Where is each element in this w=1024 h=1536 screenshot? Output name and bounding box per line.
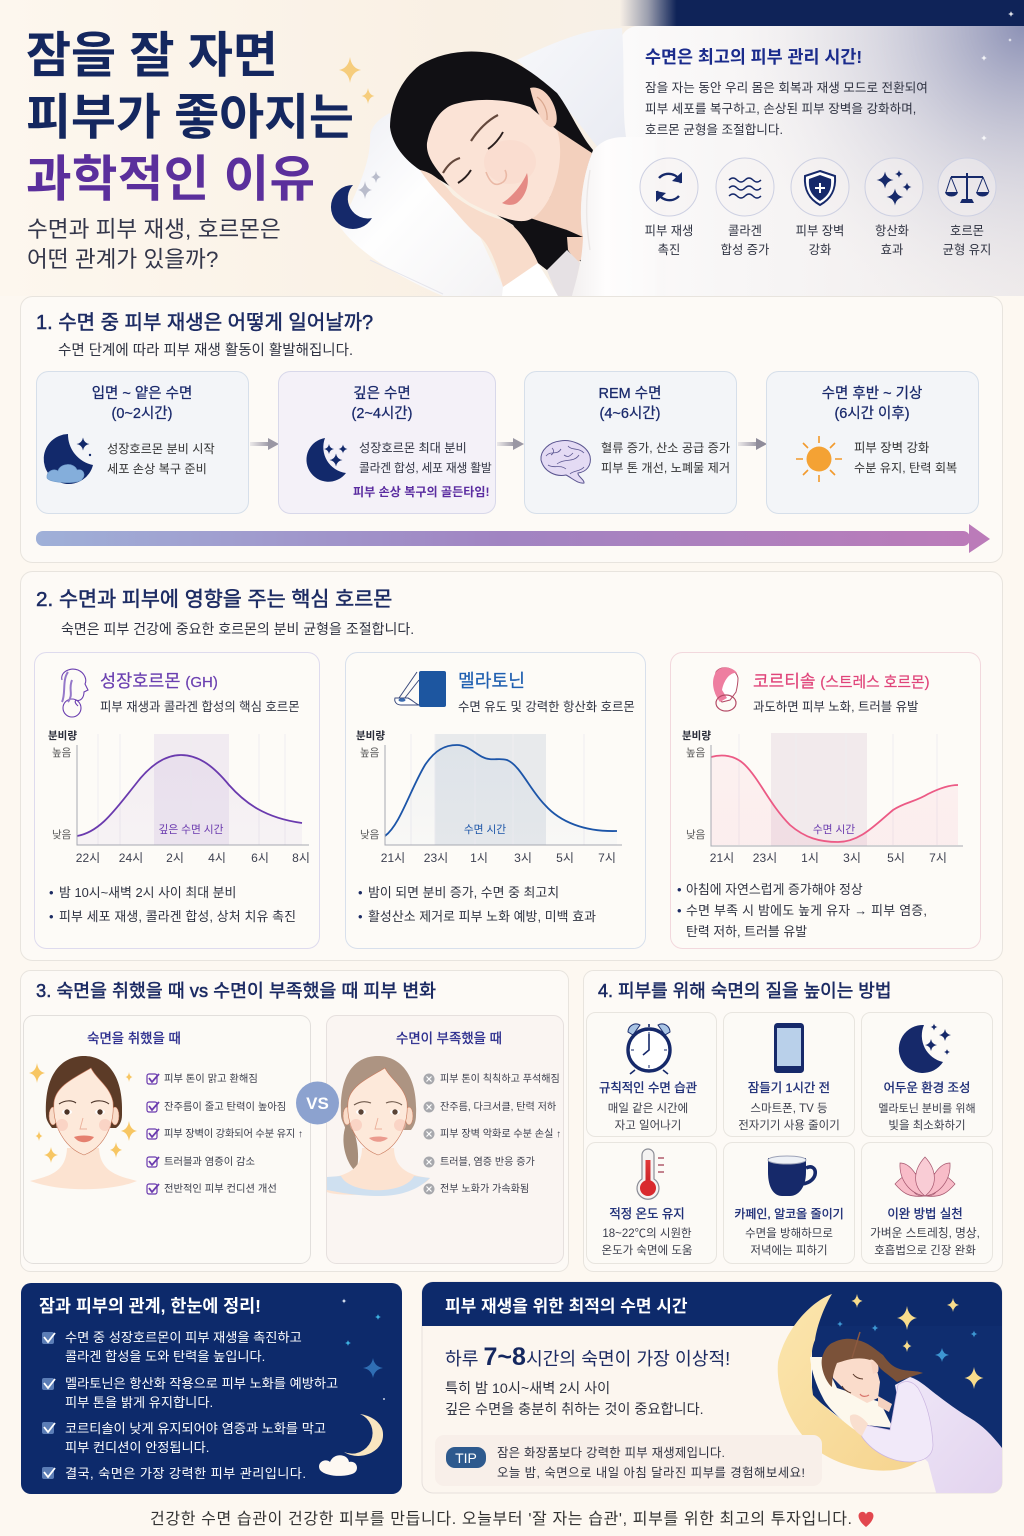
- step card: deep sleep: (2~4시간): [352, 405, 412, 422]
- step card: REM sleep: 피부 톤 개선, 노폐물 제거: [601, 461, 730, 475]
- icon: smartphone: [774, 1023, 804, 1073]
- line chart: growth hormone: 4시: [208, 851, 226, 865]
- line chart: cortisol: 3시: [843, 851, 861, 865]
- VS badge: [296, 1082, 339, 1124]
- summary list: 피부 톤을 밝게 유지합니다.: [65, 1395, 213, 1410]
- hero subtitle: 수면과 피부 재생, 호르몬은: [27, 217, 281, 242]
- bullet notes: •: [677, 903, 682, 918]
- section 1 subtitle: 수면 단계에 따라 피부 재생 활동이 활발해집니다.: [58, 342, 353, 359]
- section 1: skin regeneration during sleep: [20, 296, 1002, 562]
- line chart: melatonin: 수면 시간: [464, 824, 506, 836]
- checklist: benefits: 잔주름이 줄고 탄력이 높아짐: [164, 1101, 286, 1113]
- line chart: cortisol: 1시: [801, 851, 819, 865]
- section 3: good sleep vs poor sleep: [20, 970, 568, 1272]
- icon: head silhouette purple: [62, 669, 88, 717]
- step card: REM sleep: REM 수면: [599, 385, 661, 402]
- line chart: growth hormone: 22시: [76, 851, 100, 865]
- tip card: dark environment: 빛을 최소화하기: [888, 1118, 966, 1132]
- line chart: melatonin: 7시: [598, 851, 616, 865]
- icon: moon and stars: [899, 1024, 951, 1073]
- section 4 heading: 4. 피부를 위해 숙면의 질을 높이는 방법: [598, 981, 891, 1001]
- tip card: dark environment: 어두운 환경 조성: [884, 1081, 970, 1095]
- step card: deep sleep: 성장호르몬 최대 분비: [359, 441, 467, 455]
- benefit icon: collagen: 콜라겐: [728, 224, 762, 238]
- summary list: 코르티솔이 낮게 유지되어야 염증과 노화를 막고: [65, 1421, 326, 1436]
- panel: sleep deprived: [326, 1016, 564, 1264]
- hero title: 과학적인 이유: [26, 152, 315, 207]
- line chart: growth hormone: 분비량: [48, 729, 77, 742]
- section 2 heading: 2. 수면과 피부에 영향을 주는 핵심 호르몬: [36, 588, 392, 611]
- tip card: temperature: 적정 온도 유지: [609, 1207, 685, 1221]
- summary list: 콜라겐 합성을 도와 탄력을 높입니다.: [65, 1349, 265, 1364]
- line chart: melatonin: 낮음: [360, 829, 380, 841]
- hero subtitle: [27, 217, 281, 272]
- benefit icon: skin renewal: [640, 158, 698, 257]
- bullet notes: 밤 10시~새벽 2시 사이 최대 분비: [59, 885, 236, 900]
- step card: light sleep: 입면 ~ 얕은 수면: [92, 385, 192, 402]
- step card: late sleep and waking: 수면 후반 ~ 기상: [822, 385, 922, 402]
- hormone card: melatonin: [346, 652, 646, 948]
- benefit icon: skin renewal: 촉진: [658, 243, 680, 257]
- panel: well rested: [24, 1016, 310, 1264]
- step card: REM sleep: [524, 372, 736, 514]
- hero section: [27, 0, 1024, 296]
- hero backdrop: [231, 0, 1024, 296]
- bullet notes: [358, 885, 596, 924]
- checklist: problems: 잔주름, 다크서클, 탄력 저하: [440, 1100, 557, 1113]
- step card: late sleep and waking: 수분 유지, 탄력 회복: [854, 461, 957, 475]
- line chart: growth hormone: 2시: [166, 851, 184, 865]
- heading: melatonin: 멜라토닌: [458, 671, 525, 691]
- tip card: relaxation: 이완 방법 실천: [887, 1206, 963, 1221]
- bullet notes: 수면 부족 시 밤에도 높게 유자 → 피부 염증,: [686, 903, 927, 918]
- footer message: 건강한 수면 습관이 건강한 피부를 만듭니다. 오늘부터 '잘 자는 습관', 피부를 위한 최고의 투자입니다.: [150, 1510, 852, 1528]
- tip card: no screens: [724, 1012, 854, 1136]
- recommendation text: 특히 밤 10시~새벽 2시 사이: [445, 1381, 610, 1397]
- checklist: benefits: [147, 1072, 303, 1195]
- step card: light sleep: [36, 372, 248, 514]
- checklist: benefits: 피부 톤이 맑고 환해짐: [164, 1072, 258, 1085]
- line chart: melatonin: [356, 729, 622, 865]
- VS badge: VS: [306, 1094, 329, 1113]
- step card: light sleep: 성장호르몬 분비 시작: [107, 442, 215, 456]
- icon: thermometer: [637, 1149, 664, 1199]
- recommendation text: 깊은 수면을 충분히 취하는 것이 중요합니다.: [445, 1402, 704, 1418]
- checklist: benefits: 피부 장벽이 강화되어 수분 유지 ↑: [164, 1128, 303, 1140]
- tip box: 잠은 화장품보다 강력한 피부 재생제입니다.: [497, 1446, 725, 1460]
- bullet notes: 활성산소 제거로 피부 노화 예방, 미백 효과: [368, 909, 596, 924]
- timeline arrow: [36, 524, 990, 553]
- tip card: regular sleep habit: 매일 같은 시간에: [608, 1101, 688, 1115]
- summary list: [65, 1330, 338, 1481]
- hero intro text: 피부 세포를 복구하고, 손상된 피부 장벽을 강화하며,: [645, 102, 916, 116]
- icon: alarm clock: [628, 1024, 670, 1074]
- benefit icon: collagen: 합성 증가: [721, 243, 769, 257]
- step card: REM sleep: (4~6시간): [600, 405, 660, 422]
- step card: deep sleep: 깊은 수면: [353, 385, 411, 402]
- tip card: no screens: 전자기기 사용 줄이기: [738, 1119, 840, 1132]
- benefit icon: skin barrier shield: [791, 158, 849, 257]
- tip card: caffeine and alcohol: 수면을 방해하므로: [745, 1226, 833, 1240]
- tip card: dark environment: [862, 1012, 992, 1136]
- benefit icon: hormone balance scale: 호르몬: [950, 224, 984, 238]
- bullet notes: •: [358, 909, 363, 924]
- line chart: melatonin: 높음: [360, 747, 380, 759]
- panel heading: 피부 재생을 위한 최적의 수면 시간: [445, 1297, 688, 1316]
- description: 피부 재생과 콜라겐 합성의 핵심 호르몬: [100, 699, 300, 714]
- summary panel: sleep and skin at a glance: [21, 1283, 402, 1494]
- tip card: temperature: 18~22℃의 시원한: [602, 1226, 692, 1240]
- summary list: 수면 중 성장호르몬이 피부 재생을 촉진하고: [65, 1330, 302, 1345]
- step card: late sleep and waking: [766, 372, 978, 514]
- bullet notes: 피부 세포 재생, 콜라겐 합성, 상처 치유 촉진: [59, 909, 296, 924]
- checklist: problems: [424, 1072, 561, 1195]
- bullet notes: •: [49, 909, 54, 924]
- line chart: cortisol: 21시: [710, 851, 734, 865]
- arrow: step 3 to 4: [738, 438, 767, 450]
- icon: melatonin book and pendant: [395, 671, 446, 707]
- section 3 heading: 3. 숙면을 취했을 때 vs 수면이 부족했을 때 피부 변화: [36, 980, 436, 1001]
- checklist: problems: 전부 노화가 가속화됨: [440, 1183, 529, 1195]
- tip card: regular sleep habit: [586, 1012, 716, 1136]
- icon: mug: [768, 1156, 815, 1196]
- benefit icon: hormone balance scale: [938, 158, 996, 257]
- bullet notes: 아침에 자연스럽게 증가해야 정상: [686, 882, 863, 897]
- step card: deep sleep: 콜라겐 합성, 세포 재생 활발: [359, 461, 492, 475]
- benefit icon: skin barrier shield: 강화: [809, 243, 831, 257]
- line chart: melatonin: 21시: [381, 851, 405, 865]
- hero intro text: 잠을 자는 동안 우리 몸은 회복과 재생 모드로 전환되여: [645, 81, 928, 95]
- hero title: [26, 29, 354, 207]
- line chart: cortisol: 낮음: [686, 829, 706, 841]
- summary list: 결국, 숙면은 가장 강력한 피부 관리입니다.: [65, 1466, 306, 1481]
- checklist: problems: 피부 장벽 악화로 수분 손실 ↑: [440, 1128, 561, 1140]
- tip card: relaxation: [862, 1142, 992, 1264]
- step card: late sleep and waking: 피부 장벽 강화: [854, 441, 929, 455]
- step card: late sleep and waking: (6시간 이후): [834, 405, 910, 422]
- checklist: problems: 트러블, 염증 반응 증가: [440, 1156, 535, 1168]
- bullet notes: [49, 885, 296, 924]
- line chart: melatonin: 3시: [514, 851, 532, 865]
- arrow: step 2 to 3: [497, 438, 524, 450]
- benefit icon: antioxidant sparkles: [865, 158, 923, 257]
- tip card: temperature: [586, 1142, 716, 1264]
- summary list: 피부 컨디션이 안정됩니다.: [65, 1440, 209, 1455]
- tip card: caffeine and alcohol: 카페인, 알코올 줄이기: [734, 1207, 844, 1221]
- hero subtitle: 어떤 관계가 있을까?: [27, 247, 218, 272]
- tip card: regular sleep habit: 규칙적인 수면 습관: [599, 1081, 697, 1095]
- line chart: cortisol: 분비량: [682, 729, 711, 742]
- icon: moon and cloud: [319, 1414, 383, 1476]
- line chart: growth hormone: 깊은 수면 시간: [159, 824, 224, 836]
- panel: optimal sleep time: [422, 1282, 1002, 1500]
- icon: lotus: [895, 1157, 955, 1196]
- bullet notes: •: [49, 885, 54, 900]
- tip box: [435, 1435, 822, 1486]
- line chart: cortisol: 수면 시간: [813, 824, 855, 836]
- line chart: melatonin: 5시: [556, 851, 574, 865]
- line chart: melatonin: 분비량: [356, 729, 385, 742]
- tip card: caffeine and alcohol: [724, 1142, 854, 1264]
- summary heading: 잠과 피부의 관계, 한눈에 정리!: [39, 1296, 261, 1316]
- illustration: tired face: [327, 1056, 430, 1196]
- bullet notes: •: [677, 882, 682, 897]
- icon: crescent moon: [331, 171, 381, 229]
- line chart: growth hormone: 8시: [292, 851, 310, 865]
- recommendation text: 하루 7~8시간의 숙면이 가장 이상적!: [445, 1343, 730, 1371]
- recommendation text: [445, 1343, 730, 1418]
- benefit icon: hormone balance scale: 균형 유지: [943, 243, 991, 257]
- tip card: no screens: 잠들기 1시간 전: [748, 1081, 830, 1095]
- arrow: step 1 to 2: [250, 438, 279, 450]
- hormone card: cortisol: [670, 652, 980, 948]
- checklist: benefits: 전반적인 피부 컨디션 개선: [164, 1183, 277, 1195]
- icon: stars: [342, 1298, 385, 1400]
- step card: deep sleep: 피부 손상 복구의 골든타임!: [353, 485, 490, 499]
- hero title: 피부가 좋아지는: [26, 91, 354, 145]
- description: 수면 유도 및 강력한 항산화 호르몬: [458, 700, 635, 714]
- line chart: growth hormone: 24시: [119, 851, 143, 865]
- checklist: problems: 피부 톤이 칙칙하고 푸석해짐: [440, 1072, 560, 1085]
- panel title: 수면이 부족했을 때: [396, 1031, 502, 1046]
- section 1 heading: 1. 수면 중 피부 재생은 어떻게 일어날까?: [36, 311, 373, 334]
- illustration: healthy face: [30, 1056, 137, 1189]
- hero title: 잠을 잘 자면: [26, 29, 278, 83]
- benefit icon: antioxidant sparkles: 항산화: [875, 224, 909, 238]
- heading: growth hormone: 성장호르몬 (GH): [100, 671, 218, 691]
- line chart: growth hormone: [48, 729, 310, 865]
- hero intro text: [645, 47, 928, 137]
- section 2 subtitle: 숙면은 피부 건강에 중요한 호르몬의 분비 균형을 조절합니다.: [61, 621, 414, 637]
- step card: deep sleep: [278, 372, 496, 514]
- icon: brain: [541, 441, 590, 483]
- benefit icon: collagen: [716, 158, 774, 257]
- tip box: TIP: [455, 1450, 477, 1466]
- line chart: cortisol: 23시: [753, 851, 777, 865]
- bullet notes: 탄력 저하, 트러블 유발: [686, 924, 807, 939]
- icon: gold sparkles: [339, 57, 374, 104]
- hormone card: growth hormone: [34, 652, 320, 948]
- benefit icon: skin renewal: 피부 재생: [645, 224, 693, 238]
- tip box: 오늘 밤, 숙면으로 내일 아침 달라진 피부를 경험해보세요!: [497, 1466, 805, 1480]
- section 2: key hormones: [20, 572, 1002, 960]
- tip card: regular sleep habit: 자고 일어나기: [615, 1118, 681, 1132]
- step card: REM sleep: 혈류 증가, 산소 공급 증가: [601, 441, 730, 455]
- line chart: cortisol: 높음: [686, 747, 706, 759]
- line chart: growth hormone: 낮음: [52, 829, 72, 841]
- heading: cortisol: 코르티솔 (스트레스 호르몬): [753, 672, 930, 691]
- line chart: cortisol: 5시: [887, 851, 905, 865]
- tip card: caffeine and alcohol: 저녁에는 피하기: [750, 1243, 828, 1257]
- line chart: growth hormone: 6시: [251, 851, 269, 865]
- illustration: woman sleeping on the moon: [778, 1294, 1002, 1500]
- bullet notes: [677, 882, 927, 939]
- panel title: 숙면을 취했을 때: [87, 1031, 181, 1046]
- step card: light sleep: (0~2시간): [112, 405, 172, 422]
- hero intro text: 수면은 최고의 피부 관리 시간!: [645, 47, 862, 67]
- line chart: growth hormone: 높음: [52, 747, 72, 759]
- summary list: 멜라토닌은 항산화 작용으로 피부 노화를 예방하고: [65, 1376, 338, 1391]
- panel header band: [422, 1282, 1002, 1326]
- checklist: benefits: 트러블과 염증이 감소: [164, 1156, 255, 1168]
- line chart: melatonin: 1시: [470, 851, 488, 865]
- step card: light sleep: 세포 손상 복구 준비: [107, 462, 207, 476]
- description: 과도하면 피부 노화, 트러블 유발: [753, 700, 918, 714]
- icon: gold sparkles: [29, 1063, 137, 1163]
- line chart: cortisol: 7시: [929, 851, 947, 865]
- benefit icon: skin barrier shield: 피부 장벽: [796, 224, 844, 238]
- checkbox icons: [42, 1332, 55, 1479]
- bullet notes: •: [358, 885, 363, 900]
- illustration: woman sleeping on a pillow: [340, 28, 668, 296]
- bullet notes: 밤이 되면 분비 증가, 수면 중 최고치: [368, 885, 559, 900]
- tip card: no screens: 스마트폰, TV 등: [750, 1102, 828, 1115]
- tip card: relaxation: 호흡법으로 긴장 완화: [874, 1243, 976, 1257]
- tip card: temperature: 온도가 숙면에 도움: [601, 1244, 693, 1257]
- tip card: relaxation: 가벼운 스트레칭, 명상,: [870, 1227, 980, 1240]
- hero intro text: 호르몬 균형을 조절합니다.: [645, 123, 783, 137]
- section 4: ways to improve sleep quality: [584, 970, 1002, 1272]
- tip card: dark environment: 멜라토닌 분비를 위해: [878, 1101, 976, 1115]
- benefit icon: antioxidant sparkles: 효과: [881, 243, 903, 257]
- line chart: melatonin: 23시: [424, 851, 448, 865]
- line chart: cortisol: [682, 729, 963, 865]
- icon: head silhouette pink: [713, 667, 738, 711]
